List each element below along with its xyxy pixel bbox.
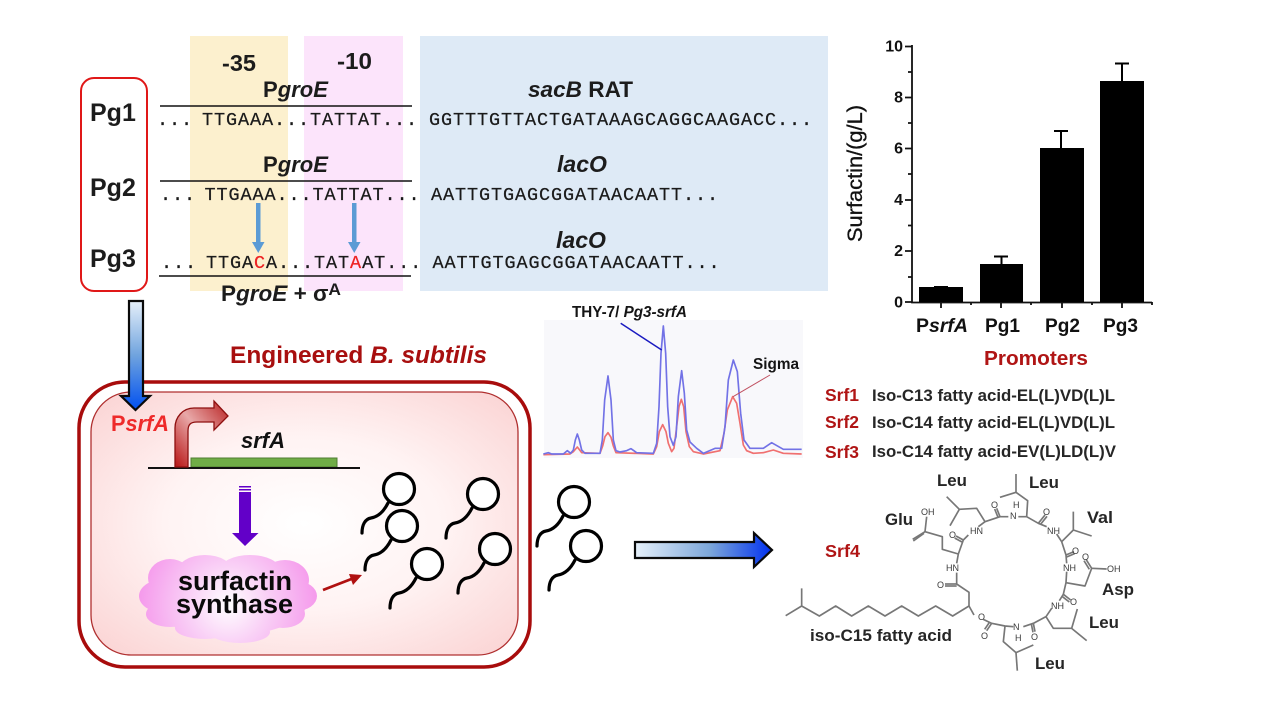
x labels: Pg2 — [1045, 315, 1080, 337]
cloud: surfactin synthase: synthase — [176, 589, 293, 619]
x labels: Pg3 — [1103, 315, 1138, 337]
arrow: transcription start — [175, 401, 228, 467]
x axis title: Promoters — [984, 347, 1088, 370]
row 3 sequence — [159, 253, 721, 276]
arrow: expression — [232, 486, 258, 546]
atom labels: O — [1043, 507, 1050, 517]
cloud: surfactin synthase: surfactin — [178, 566, 292, 596]
amino acid labels: Val — [1087, 508, 1113, 527]
y tick labels: 10 — [885, 38, 903, 56]
promoter label box: Pg1 Pg2 Pg3: Pg2 — [90, 174, 136, 202]
red trace — [543, 397, 802, 455]
amino acid labels: Glu — [885, 510, 913, 529]
row 1 sequence: GGTTTGTTACTGATAAAGCAGGCAAGACC... — [429, 110, 813, 131]
row 2 sequence — [160, 181, 719, 206]
promoter label box: Pg1 Pg2 Pg3 — [81, 78, 147, 291]
arrow: -35 mutation — [252, 203, 264, 253]
atom labels: O — [1082, 552, 1089, 562]
label: Srf4: Srf4 — [825, 541, 860, 561]
Srf3: Srf3 — [825, 442, 859, 462]
atom labels: NH — [1051, 601, 1064, 611]
axes — [905, 45, 1152, 308]
atom labels: OH — [1107, 564, 1120, 574]
y tick labels — [885, 38, 903, 312]
atom labels: O — [1070, 597, 1077, 607]
amino acid labels: Leu — [937, 471, 967, 490]
atom labels: O — [949, 530, 956, 540]
label: srfA: srfA — [241, 428, 285, 453]
atom labels: N — [1013, 622, 1020, 632]
y tick labels: 6 — [894, 140, 903, 158]
row 3 sequence: ... — [161, 253, 197, 274]
bacteria / surfactin micelles — [362, 474, 602, 608]
arrow: -10 mutation — [348, 203, 360, 253]
Srf2: Srf2 — [825, 412, 859, 432]
chromatogram — [543, 304, 803, 458]
atom labels: NH — [1063, 563, 1076, 573]
atom labels: O — [991, 500, 998, 510]
cloud: surfactin synthase — [139, 555, 317, 643]
atom labels: N — [1010, 511, 1016, 521]
atom labels: NH — [1047, 526, 1060, 536]
atom labels: HN — [970, 526, 983, 536]
heading: Engineered B. subtilis: Engineered B. subtilis — [230, 342, 487, 369]
row 1 sequence: ... — [157, 110, 193, 131]
atom labels: O — [978, 612, 985, 622]
heading: lacO row 2: lacO — [557, 151, 607, 177]
label: THY-7/ Pg3-srfA: THY-7/ Pg3-srfA — [572, 304, 687, 321]
heading: PgroE row 1: PgroE — [263, 77, 329, 102]
atom labels: HN — [946, 563, 959, 573]
atom labels: O — [937, 580, 944, 590]
blue trace — [543, 326, 802, 454]
bonds — [786, 474, 1107, 671]
x labels — [916, 315, 1138, 337]
heading: sacB RAT: sacB RAT — [528, 77, 633, 102]
atom labels: O — [1031, 632, 1038, 642]
panel: regulatory sequence band — [420, 36, 828, 291]
Srf1: Iso-C13 fatty acid-EL(L)VD(L)L — [872, 386, 1115, 405]
label: -35: -35 — [222, 50, 256, 76]
y tick labels: 2 — [894, 243, 903, 260]
row 2 sequence: TTGAAA...TATTAT... — [204, 185, 421, 206]
x labels: Pg1 — [985, 315, 1020, 337]
label: Sigma: Sigma — [753, 356, 799, 373]
atom labels: H — [1015, 633, 1022, 643]
y tick labels: 8 — [894, 90, 903, 106]
panel: engineered cell — [79, 382, 530, 667]
promoter sequences — [157, 48, 813, 306]
chemical structure: surfactin — [786, 471, 1134, 673]
amino acid labels: Asp — [1102, 580, 1134, 599]
amino acid labels: Leu — [1089, 613, 1119, 632]
gene construct — [148, 401, 360, 468]
row 1 sequence — [157, 106, 813, 131]
promoter label box: Pg1 Pg2 Pg3: Pg1 — [90, 99, 136, 127]
amino acid labels: Leu — [1029, 473, 1059, 492]
atom labels: O — [1072, 546, 1079, 556]
gene bar — [191, 458, 337, 467]
heading: lacO row 3: lacO — [556, 227, 606, 253]
heading: PgroE row 2: PgroE — [263, 152, 329, 177]
row 2 sequence: ... — [160, 185, 196, 206]
arrow: promoter insertion — [121, 301, 150, 410]
y axis title: Surfactin/(g/L) — [844, 105, 867, 242]
atom labels: H — [1013, 500, 1020, 510]
y tick labels: 4 — [894, 192, 903, 209]
row 3 sequence: AATTGTGAGCGGATAACAATT... — [432, 253, 721, 274]
arrow: synthase to surfactin — [323, 574, 362, 590]
row 1 sequence: TTGAAA...TATTAT... — [202, 110, 418, 131]
bar chart: surfactin titer by promoter — [844, 38, 1152, 370]
panel: -10 promoter region band — [304, 36, 403, 291]
label: iso-C15 fatty acid: iso-C15 fatty acid — [810, 626, 952, 645]
heading: PgroE + sigma A: PgroE + σ — [221, 281, 327, 306]
amino acid labels — [885, 471, 1134, 673]
x labels: PsrfA — [916, 315, 968, 337]
label: -10: -10 — [337, 48, 372, 74]
promoter label box: Pg1 Pg2 Pg3: Pg3 — [90, 245, 136, 273]
error bars — [934, 63, 1129, 288]
atom labels: OH — [921, 507, 934, 517]
atom labels — [921, 500, 1120, 643]
label: PsrfA: PsrfA — [111, 411, 169, 436]
bars — [919, 81, 1144, 302]
Srf3: Iso-C14 fatty acid-EV(L)LD(L)V — [872, 442, 1117, 461]
amino acid labels: Leu — [1035, 654, 1065, 673]
row 3 sequence: TTGACA...TATAAT... — [206, 253, 422, 274]
heading: PgroE + sigma A: A — [328, 280, 341, 299]
panel: -35 promoter region band — [190, 36, 288, 291]
leader line blue — [621, 323, 662, 350]
Srf2: Iso-C14 fatty acid-EL(L)VD(L)L — [872, 413, 1115, 432]
arrow: cell to product — [635, 533, 772, 567]
surfactin variant list — [825, 385, 1117, 462]
y tick labels: 0 — [894, 294, 903, 312]
leader line red — [733, 375, 770, 397]
Srf1: Srf1 — [825, 385, 859, 405]
row 2 sequence: AATTGTGAGCGGATAACAATT... — [431, 185, 719, 206]
atom labels: O — [981, 631, 988, 641]
